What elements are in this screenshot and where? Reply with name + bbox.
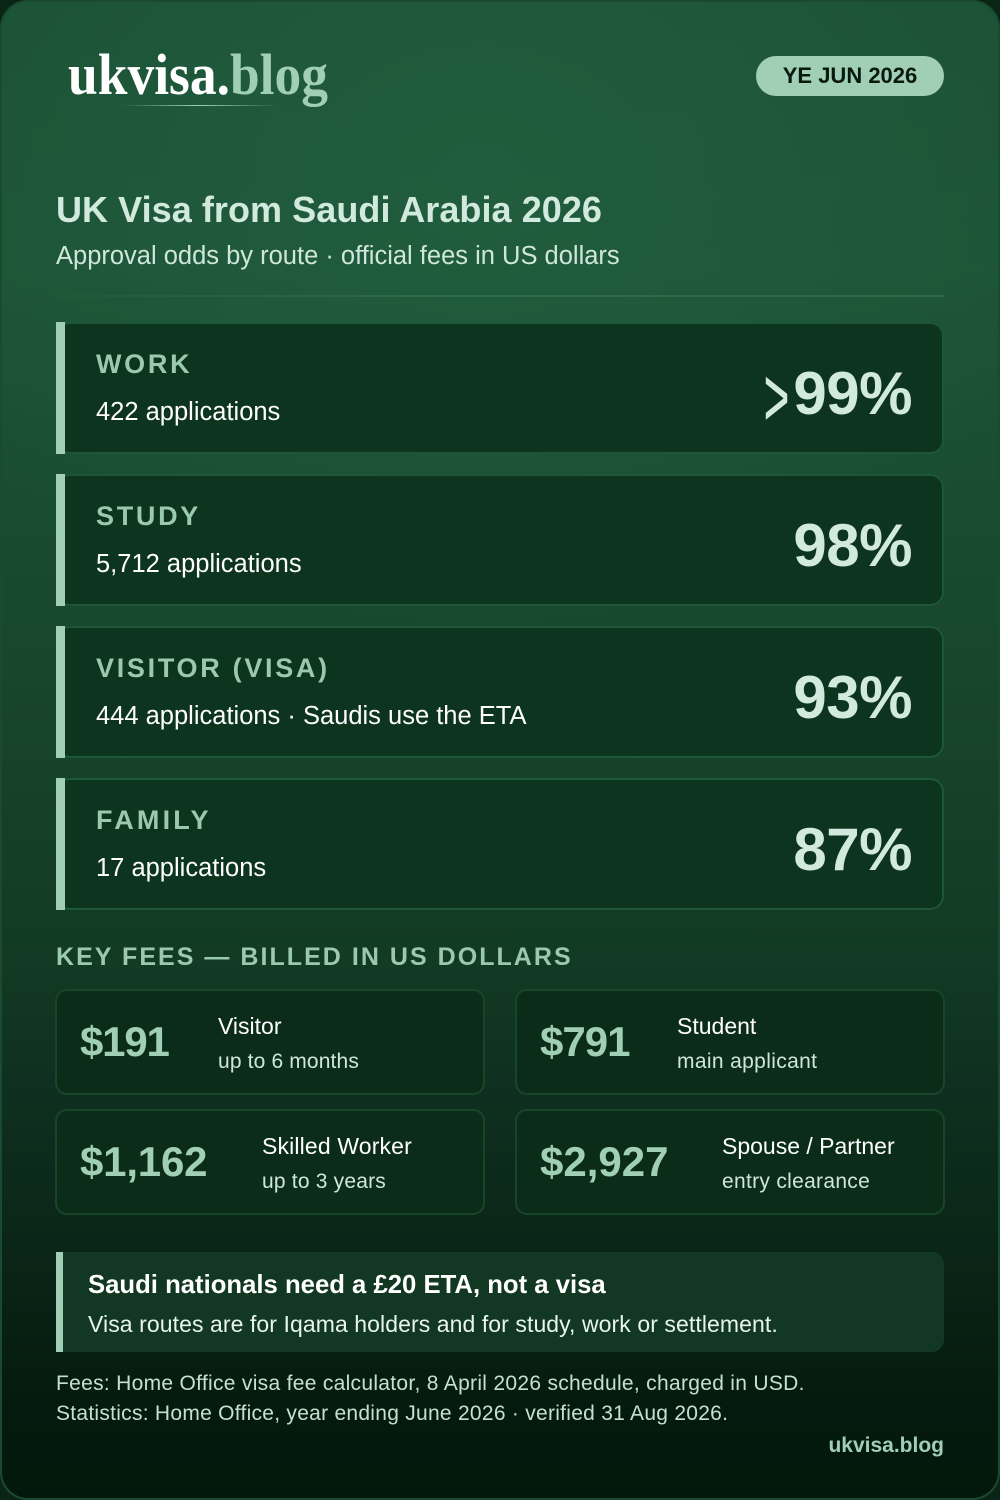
- family applications: 17 applications: [96, 854, 266, 882]
- title: UK Visa from Saudi Arabia 2026: [56, 189, 602, 230]
- fee name: Visitor: [218, 1013, 282, 1039]
- panel: visitor: [56, 626, 944, 758]
- logo: ukvisa.blog: [68, 42, 328, 107]
- source notes: Statistics: Home Office, year ending June 2026 · verified 31 Aug 2026.: [56, 1402, 728, 1425]
- callout body: Visa routes are for Iqama holders and for study, work or settlement.: [88, 1311, 778, 1337]
- study label: STUDY: [96, 501, 201, 531]
- subtitle: Approval odds by route · official fees in US dollars: [56, 242, 620, 270]
- fee detail: up to 3 years: [262, 1170, 386, 1193]
- callout: ETA notice: [56, 1252, 944, 1352]
- visitor label: VISITOR (VISA): [96, 653, 330, 683]
- key fees heading: KEY FEES — BILLED IN US DOLLARS: [56, 943, 573, 971]
- work applications: 422 applications: [96, 398, 280, 426]
- footer site name: ukvisa.blog: [828, 1434, 944, 1457]
- fee card: skilled worker: [55, 1109, 485, 1215]
- text: >: [764, 351, 789, 444]
- callout heading: Saudi nationals need a £20 ETA, not a visa: [88, 1271, 606, 1299]
- work approval rate: [764, 351, 912, 444]
- family approval rate: 87%: [793, 816, 912, 883]
- fee name: Spouse / Partner: [722, 1133, 895, 1159]
- source notes: [56, 1372, 805, 1425]
- study approval rate: 98%: [793, 512, 912, 579]
- panel: study: [56, 474, 944, 606]
- fee detail: up to 6 months: [218, 1050, 359, 1073]
- visitor approval rate: 93%: [793, 664, 912, 731]
- work label: WORK: [96, 349, 192, 379]
- fee card: student: [515, 989, 945, 1095]
- source notes: Fees: Home Office visa fee calculator, 8 April 2026 schedule, charged in USD.: [56, 1372, 805, 1395]
- fee name: Skilled Worker: [262, 1133, 412, 1159]
- fee detail: main applicant: [677, 1050, 817, 1073]
- fee amount: $791: [540, 1018, 629, 1065]
- fee detail: entry clearance: [722, 1170, 870, 1193]
- badge: YE JUN 2026: YE JUN 2026: [783, 63, 917, 88]
- fee amount: $191: [80, 1018, 169, 1065]
- panel: family: [56, 778, 944, 910]
- badge: YE JUN 2026: [756, 56, 944, 96]
- fee card: visitor: [55, 989, 485, 1095]
- fee amount: $1,162: [80, 1138, 207, 1185]
- panel: work: [56, 322, 944, 454]
- family label: FAMILY: [96, 805, 212, 835]
- fee name: Student: [677, 1013, 756, 1039]
- fee card: spouse or partner: [515, 1109, 945, 1215]
- work approval rate: 99%: [793, 360, 912, 427]
- study applications: 5,712 applications: [96, 550, 302, 578]
- visitor applications: 444 applications · Saudis use the ETA: [96, 702, 526, 730]
- fee amount: $2,927: [540, 1138, 668, 1185]
